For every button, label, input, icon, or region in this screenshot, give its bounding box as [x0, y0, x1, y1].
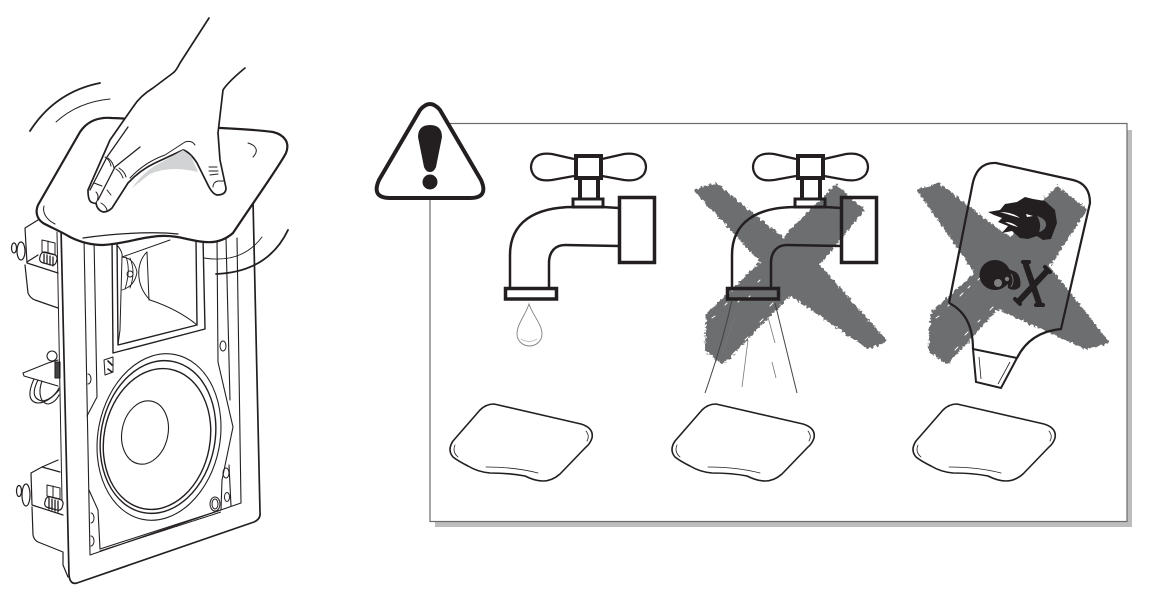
cloth icon 2 — [672, 404, 814, 481]
grey cross — [920, 185, 1107, 362]
crossbones symbol — [1015, 262, 1050, 305]
skull symbol — [980, 260, 1020, 290]
top terminal block — [12, 220, 58, 308]
grey cross — [697, 185, 884, 362]
cloth being wiped over speaker — [37, 118, 287, 245]
panel: care instructions frame — [430, 124, 1132, 527]
water drop — [517, 304, 542, 346]
icon: tap with damp water drop (allowed) — [506, 154, 654, 346]
inner frame lines — [84, 238, 241, 555]
cloth icon 1 — [450, 404, 592, 481]
icon: tap with running water crossed out — [697, 154, 884, 393]
middle bracket with wires — [23, 351, 60, 404]
bottle outline — [949, 163, 1090, 358]
mounting holes and label plate — [88, 341, 230, 546]
warning triangle icon — [377, 104, 483, 198]
woofer — [83, 343, 235, 531]
icon: chemical bottle crossed out — [920, 163, 1107, 388]
illustration: in-wall speaker — [12, 200, 260, 583]
finger and knuckle lines — [90, 127, 224, 210]
water spray lines — [705, 300, 797, 393]
speaker frame — [61, 200, 260, 583]
cloth icon 3 — [913, 404, 1055, 481]
flame symbol — [988, 197, 1057, 240]
bottle cap — [973, 349, 1017, 388]
horn tweeter — [112, 238, 205, 353]
palm shadow — [132, 150, 198, 188]
hand — [88, 18, 245, 212]
bottom terminal block — [16, 460, 68, 577]
motion arcs — [30, 83, 288, 274]
